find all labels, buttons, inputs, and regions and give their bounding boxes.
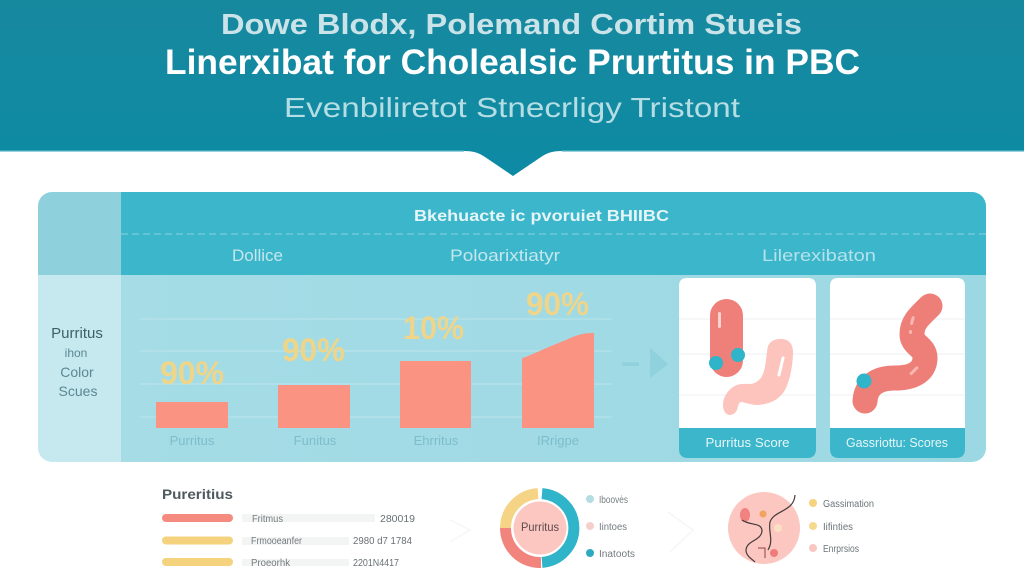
column heading: Dollice: Dollice — [232, 246, 283, 265]
legend heading: Pureritius — [162, 486, 233, 502]
icon: curved intestine — [865, 306, 930, 401]
row label: Scues — [59, 383, 97, 399]
icon legend: Gassimation — [823, 499, 874, 510]
main panel — [38, 192, 986, 462]
icon: pink intestine — [723, 339, 793, 415]
card: Purritus score — [679, 278, 816, 458]
header banner — [0, 0, 1024, 176]
bar chart: 90% — [160, 355, 224, 391]
row label — [51, 325, 103, 399]
icon legend — [809, 499, 874, 555]
donut legend: Iboovės — [599, 495, 628, 506]
icon: skin circle with nerves — [728, 492, 800, 564]
icon legend: Enrprsios — [823, 544, 859, 555]
bar chart: Ehrritus — [414, 433, 459, 448]
column heading: Poloarixtiatyr: Poloarixtiatyr — [450, 246, 560, 265]
panel heading: Bkehuacte ic pvoruiet BHIIBC — [414, 208, 670, 225]
bar chart: 90% — [282, 332, 345, 368]
bar chart — [140, 286, 612, 448]
arrow — [622, 348, 668, 378]
row 2 — [162, 536, 412, 547]
donut legend: Iintoes — [599, 522, 627, 533]
chevron — [450, 520, 470, 542]
label: Gassriottu: Scores — [846, 435, 948, 450]
legend list — [162, 486, 415, 569]
row label: ihon — [65, 346, 87, 360]
row 3: Proeorhk — [251, 558, 291, 569]
donut legend — [586, 495, 635, 560]
bar chart: 10% — [403, 310, 464, 346]
label: Purritus Score — [706, 435, 790, 450]
row 1: 280019 — [380, 514, 415, 525]
column heading: Lilerexibaton: Lilerexibaton — [762, 246, 876, 265]
title line 1: Dowe Blodx, Polemand Cortim Stueis — [221, 9, 802, 41]
row label: Color — [60, 364, 94, 380]
donut chart — [506, 494, 574, 563]
donut chart: Purritus — [521, 520, 559, 534]
row label: Purritus — [51, 325, 103, 342]
bar chart: 90% — [526, 286, 589, 322]
row 1: Fritmus — [252, 514, 283, 525]
row 3: 2201N4417 — [353, 558, 399, 569]
row 1 — [162, 514, 415, 525]
row 2: 2980 d7 1784 — [353, 536, 412, 547]
row 3 — [162, 558, 399, 569]
chevron — [668, 512, 693, 552]
icon: capsule — [710, 299, 743, 377]
card: Gassriottus Scores — [830, 278, 965, 458]
bar chart: IRrigpe — [537, 433, 579, 448]
bar chart: Purritus — [170, 433, 215, 448]
bar chart: Funitus — [294, 433, 337, 448]
icon legend: Iifinties — [823, 522, 853, 533]
donut legend: Inatoots — [599, 549, 635, 560]
title line 2: Linerxibat for Cholealsic Prurtitus in PBC — [165, 43, 860, 82]
subtitle: Evenbiliretot Stnecrligy Tristont — [284, 92, 740, 123]
row 2: Frmooeanfer — [251, 536, 303, 547]
